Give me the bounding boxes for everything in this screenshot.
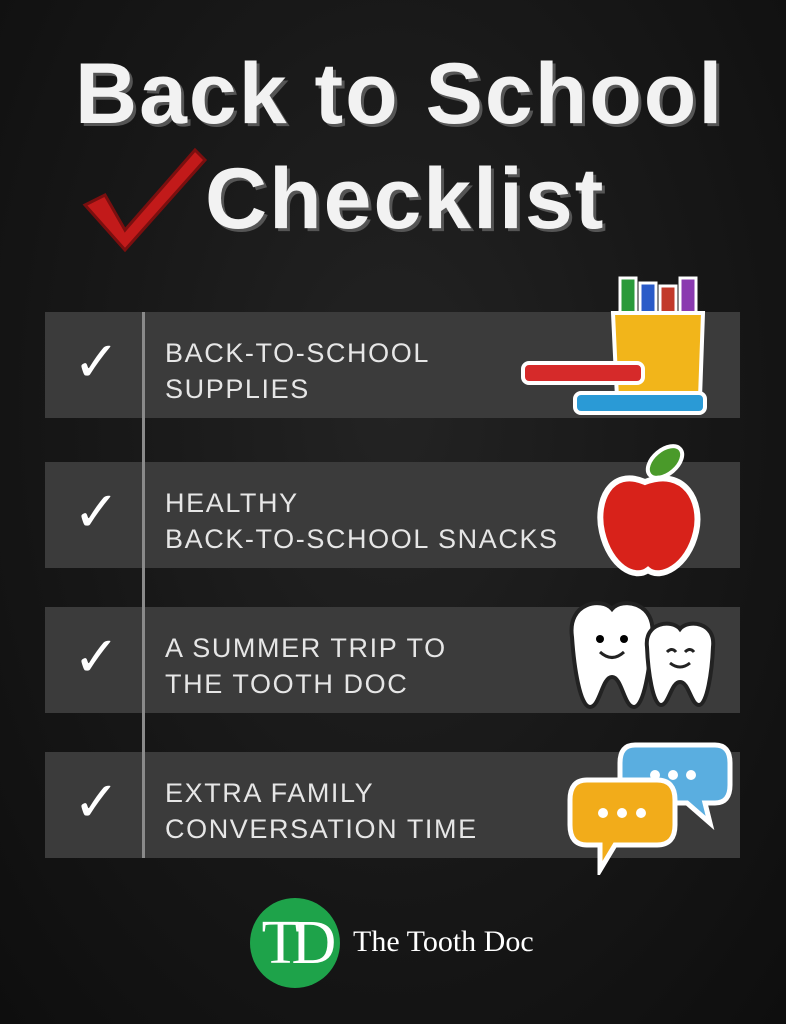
title line 2: Checklist [205, 151, 605, 247]
title line 1: Back to School [75, 46, 724, 142]
row 1: supplies: BACK-TO-SCHOOL [165, 338, 430, 368]
logo circle [250, 898, 340, 988]
row 2: snacks: HEALTHY [165, 488, 299, 518]
icon: teeth [570, 602, 716, 709]
row 3: tooth doc: THE TOOTH DOC [165, 669, 408, 699]
row 3: tooth doc [45, 607, 740, 713]
red checkmark [82, 148, 207, 252]
row 2: snacks [45, 462, 740, 568]
icon: crayons [521, 276, 707, 415]
row 2: snacks: BACK-TO-SCHOOL SNACKS [165, 524, 559, 554]
logo [250, 898, 534, 988]
row 2: snacks: ✓ [73, 480, 120, 545]
row 4: conversation [45, 752, 740, 858]
row 3: tooth doc: A SUMMER TRIP TO [165, 633, 447, 663]
icon: speech bubbles [568, 742, 732, 875]
row 1: supplies: SUPPLIES [165, 374, 310, 404]
row 3: tooth doc: ✓ [73, 625, 120, 690]
row 4: conversation: EXTRA FAMILY [165, 778, 374, 808]
row 1: supplies: ✓ [73, 330, 120, 395]
icon: apple [597, 444, 700, 576]
row 4: conversation: ✓ [73, 770, 120, 835]
row 4: conversation: CONVERSATION TIME [165, 814, 478, 844]
logo circle: TD [262, 909, 328, 977]
logo text: The Tooth Doc [353, 925, 534, 958]
row 1: supplies [45, 312, 740, 418]
